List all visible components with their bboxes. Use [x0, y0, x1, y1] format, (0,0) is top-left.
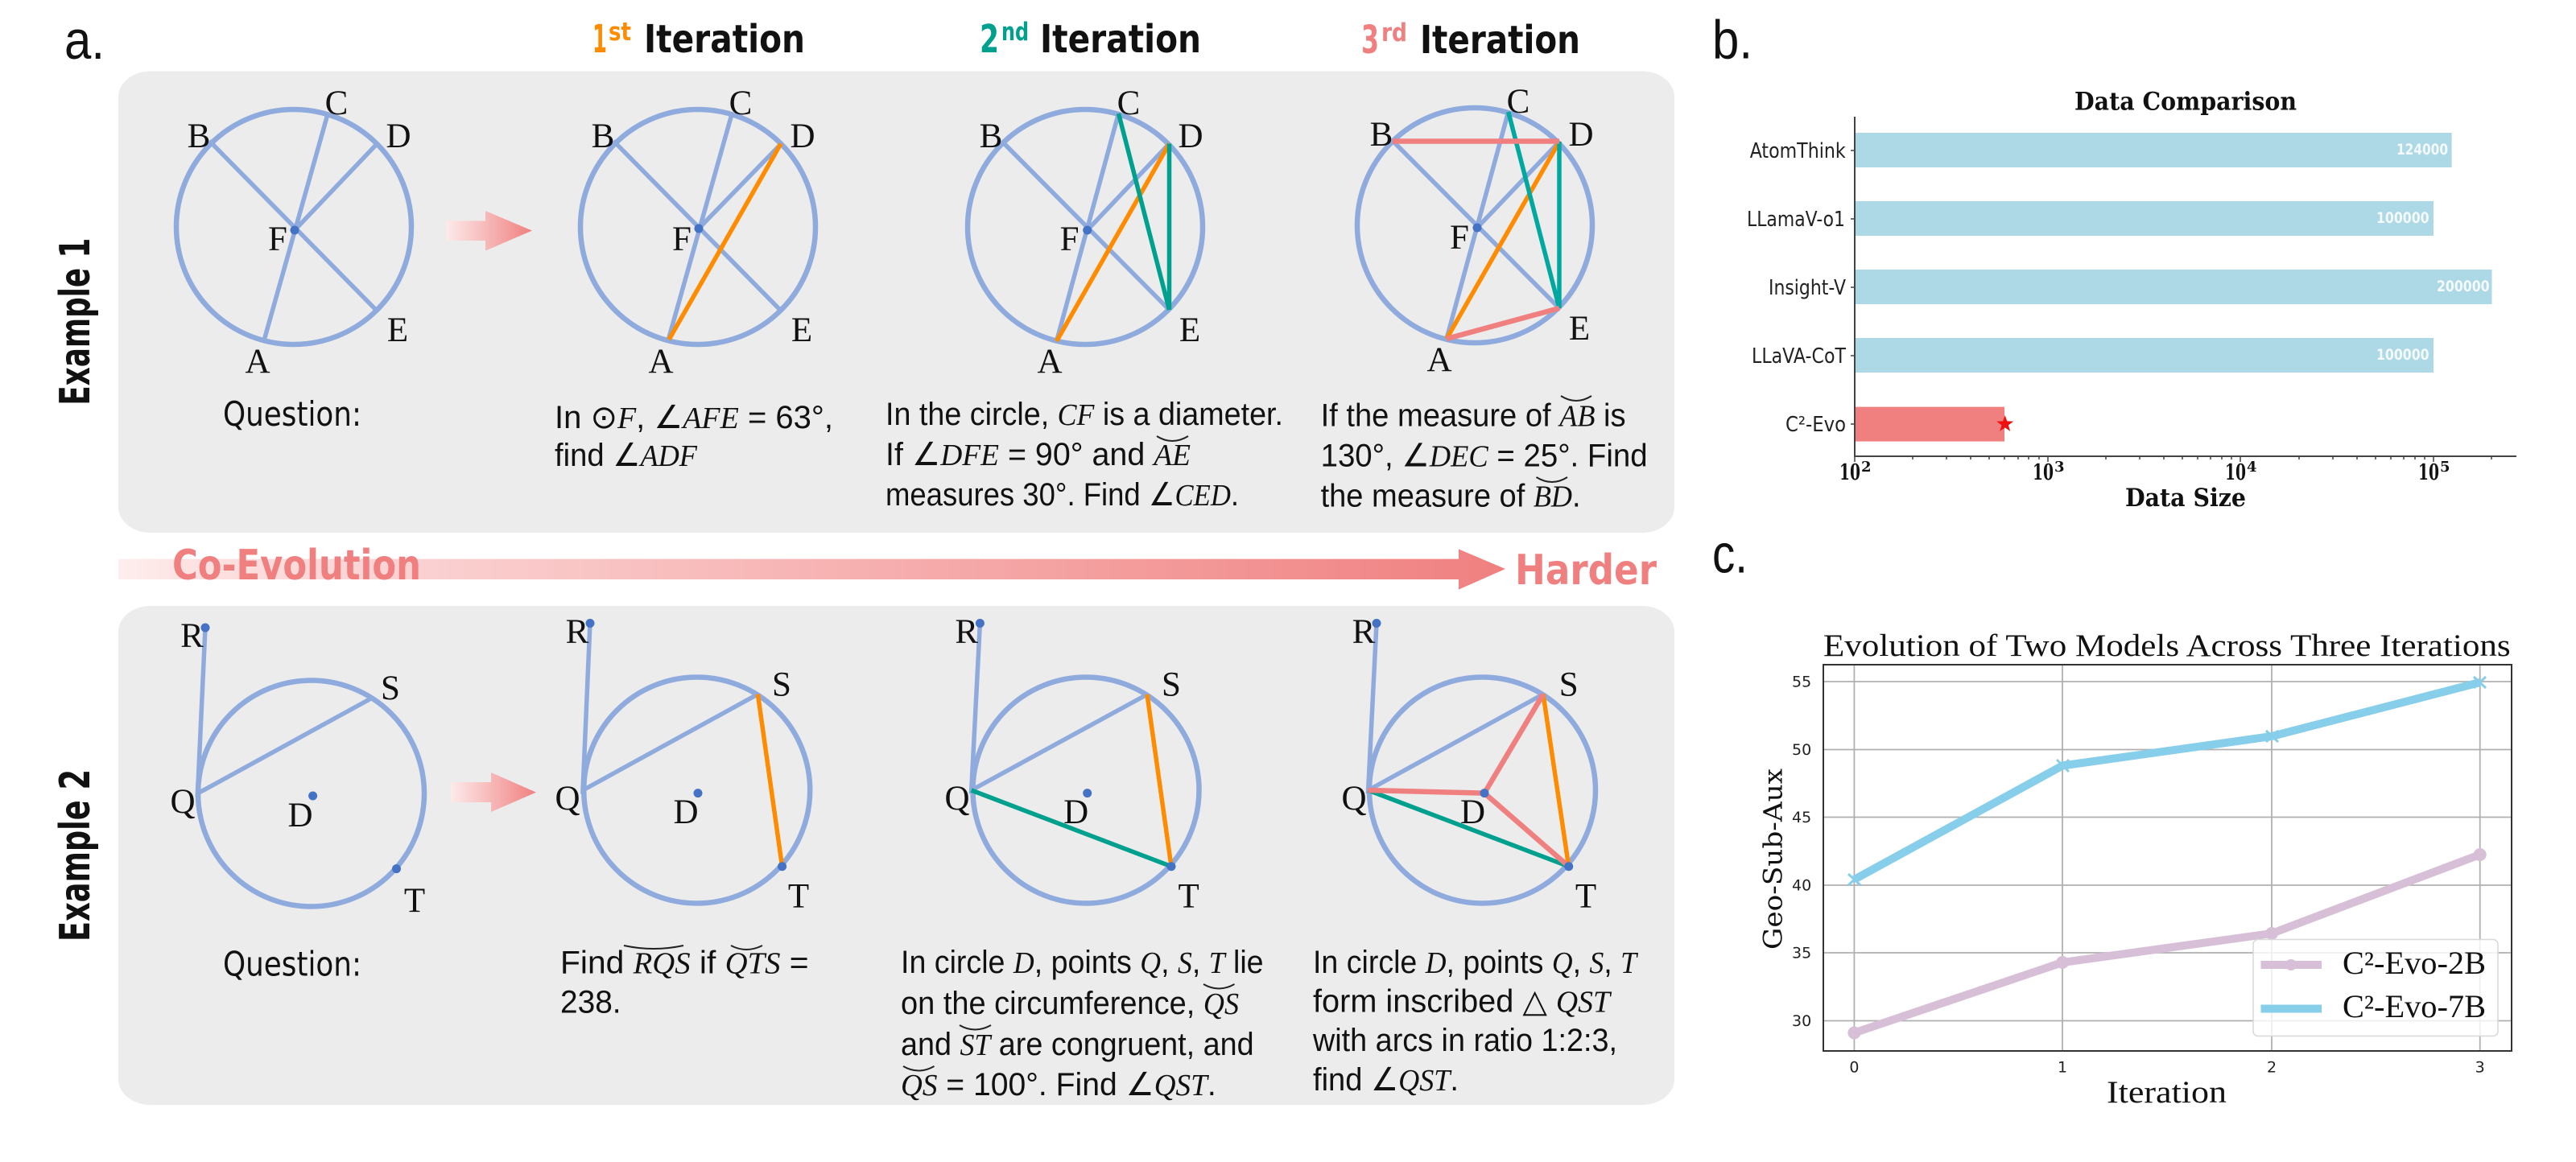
x tick labels: 10	[1839, 460, 1860, 485]
bar values: 100000	[2376, 346, 2429, 364]
diagram: example 1 iteration 3: A	[1426, 341, 1452, 379]
text: example 2 iteration 3 question: find ∠QST.	[1313, 1062, 1459, 1098]
x tick labels: 10	[2418, 460, 2439, 485]
diagram: example 2 iteration 2: S	[1162, 666, 1181, 703]
diagram: example 1 question: B	[188, 117, 210, 155]
text: co-evolution: Co-Evolution	[172, 542, 421, 590]
row label: Example 2: Example 2	[52, 769, 100, 942]
text: example 2 iteration 2 question: and ST are congruent, and	[901, 1027, 1254, 1062]
panel label c: c.	[1712, 523, 1748, 584]
text: example 1 iteration 1 question: find ∠ADF	[555, 438, 698, 473]
text: example 2 iteration 3 question: with arcs in ratio 1:2:3,	[1312, 1023, 1617, 1058]
diagram: example 2 question	[170, 617, 425, 920]
diagram: example 1 iteration 3	[1357, 83, 1594, 379]
icon: red star	[1996, 415, 2013, 431]
diagram: example 2 iteration 3: S	[1559, 666, 1579, 703]
heading: 2nd iteration	[980, 17, 1201, 62]
line: C2-Evo-2B	[1847, 848, 2487, 1040]
diagram: example 2 question: S	[381, 670, 400, 707]
y tick labels: 30	[1792, 1012, 1811, 1030]
x tick labels: 5	[2440, 459, 2450, 476]
diagram: example 2 question: T	[404, 882, 425, 920]
x tick labels: 4	[2247, 459, 2257, 476]
text: example 2 iteration 2 question: on the circumference, QS	[901, 986, 1239, 1021]
text: example 2 iteration 3 question: In circle D, points Q, S, T	[1313, 945, 1639, 980]
heading: 3rd iteration: rd	[1381, 19, 1407, 47]
chart title: Data Comparison	[2074, 88, 2297, 117]
y tick labels: 40	[1792, 877, 1811, 895]
diagram: example 2 iteration 1: S	[772, 666, 791, 703]
axes	[1855, 117, 2516, 456]
arrow: co-evolution gradient	[118, 549, 1505, 590]
diagram: example 1 iteration 2: C	[1117, 84, 1140, 122]
legend: C²-Evo-2B	[2343, 945, 2486, 981]
y category labels	[1747, 139, 1846, 437]
y category labels: LLamaV-o1	[1747, 208, 1845, 232]
diagram: example 2 iteration 3	[1341, 613, 1596, 916]
y axis label: Geo-Sub-Aux	[1758, 768, 1789, 950]
x tick labels: 1	[2058, 1059, 2067, 1077]
diagram: example 2 iteration 3: D	[1460, 793, 1485, 831]
diagram: example 1 iteration 3: D	[1568, 116, 1594, 154]
diagram: example 1 iteration 2: A	[1037, 343, 1063, 381]
legend	[2253, 940, 2498, 1036]
text: harder: Harder	[1515, 546, 1657, 595]
panel: example 1	[118, 71, 1674, 533]
text: example 2 question label: Question:	[223, 945, 361, 984]
panel: example 2	[118, 606, 1674, 1105]
heading: 2nd iteration: 2	[980, 17, 999, 62]
diagram: example 2 iteration 1: D	[673, 793, 699, 831]
diagram: example 2 iteration 3: T	[1575, 878, 1596, 916]
diagram: example 2 iteration 1	[555, 613, 810, 916]
y tick labels: 45	[1792, 809, 1811, 826]
text: example 2 iteration 1 question: Find RQS if QTS =	[560, 946, 809, 981]
diagram: example 2 iteration 1: R	[566, 613, 589, 651]
diagram: example 1 iteration 2	[968, 84, 1203, 381]
diagram: example 1 iteration 1	[580, 84, 815, 381]
line: C2-Evo-7B	[1848, 677, 2486, 885]
y category labels: AtomThink	[1750, 139, 1846, 163]
diagram: example 1 iteration 1: D	[790, 117, 815, 155]
x tick labels: 10	[2033, 460, 2054, 485]
diagram: example 2 iteration 3: Q	[1341, 780, 1367, 818]
diagram: example 1 iteration 3: B	[1370, 116, 1393, 154]
heading: 3rd iteration: Iteration	[1420, 18, 1580, 63]
legend: C²-Evo-7B	[2343, 988, 2486, 1024]
text: example 1 iteration 3 question	[1321, 396, 1648, 513]
heading: 1st iteration: st	[609, 18, 631, 47]
diagram: example 2 iteration 2: R	[955, 613, 978, 651]
x tick labels: 0	[1849, 1059, 1859, 1077]
y tick labels: 35	[1792, 945, 1811, 962]
diagram: example 1 iteration 2: F	[1060, 220, 1080, 258]
text: example 1 iteration 3 question: 130°, ∠DEC = 25°. Find	[1321, 438, 1648, 473]
heading: 1st iteration: Iteration	[644, 17, 805, 62]
diagram: example 1 question: D	[386, 117, 411, 155]
text: example 1 question label: Question:	[223, 394, 361, 434]
text: example 2 iteration 2 question: In circle D, points Q, S, T lie	[901, 945, 1264, 980]
diagram: example 1 iteration 2: E	[1179, 311, 1200, 349]
diagram: example 1 iteration 1: A	[648, 343, 674, 381]
arrow: example 2	[451, 773, 536, 812]
bar values	[2376, 141, 2490, 364]
diagram: example 1 iteration 3: F	[1450, 219, 1469, 257]
diagram: example 1 question: F	[268, 220, 287, 258]
y tick labels	[1792, 673, 1811, 1030]
x tick labels: 2	[1861, 459, 1872, 476]
text: example 1 iteration 3 question: the measure of BD.	[1321, 478, 1581, 513]
chart title: Evolution of Two Models Across Three Iterations	[1823, 628, 2511, 663]
text: example 1 iteration 2 question: If ∠DFE = 90° and AE	[886, 437, 1191, 472]
text: example 1 iteration 3 question: If the measure of AB is	[1321, 398, 1626, 433]
arrow: example 1	[446, 211, 532, 251]
diagram: example 2 iteration 1: Q	[555, 780, 580, 818]
diagram: example 1 question: A	[245, 343, 270, 381]
y tick labels: 55	[1792, 673, 1811, 690]
diagram: example 2 iteration 2: T	[1178, 878, 1199, 916]
bar values: 100000	[2376, 209, 2429, 227]
diagram: example 2 question: Q	[170, 783, 196, 821]
row label: Example 1: Example 1	[52, 238, 100, 406]
diagram: example 2 iteration 3: R	[1352, 613, 1376, 651]
diagram: example 1 iteration 1: F	[672, 220, 691, 258]
text: example 1 iteration 1 question	[555, 400, 833, 473]
diagram: example 2 iteration 2: D	[1063, 793, 1088, 831]
diagram: example 2 question: R	[180, 617, 204, 655]
diagram: example 1 iteration 1: B	[592, 117, 614, 155]
diagram: example 2 iteration 1: T	[788, 878, 809, 916]
x axis label: Data Size	[2125, 484, 2246, 513]
text: example 2 iteration 3 question	[1312, 945, 1639, 1098]
bars	[1855, 133, 2492, 442]
bar values: 200000	[2437, 278, 2490, 295]
heading: 3rd iteration: 3	[1361, 18, 1379, 63]
x tick labels	[1849, 1059, 2485, 1077]
y tick labels: 50	[1792, 741, 1811, 759]
x tick labels	[1839, 459, 2450, 485]
heading: 2nd iteration: nd	[1001, 18, 1029, 47]
y category labels: C²-Evo	[1785, 413, 1846, 437]
diagram: example 1 question	[176, 84, 411, 381]
y category labels: Insight-V	[1769, 276, 1846, 300]
text: example 2 iteration 3 question: form inscribed △ QST	[1313, 983, 1612, 1019]
panel label b: b.	[1712, 10, 1752, 71]
text: example 1 iteration 2 question: measures 30°. Find ∠CED.	[886, 477, 1239, 513]
diagram: example 2 question: D	[287, 797, 313, 834]
diagram: example 1 iteration 1: E	[791, 311, 812, 349]
bar values: 124000	[2396, 141, 2448, 159]
diagram: example 1 question: C	[325, 84, 348, 122]
diagram: example 1 iteration 2: B	[980, 117, 1002, 155]
diagram: example 1 iteration 3: E	[1569, 310, 1590, 348]
text: example 1 iteration 2 question	[886, 397, 1283, 513]
text: example 2 iteration 1 question	[560, 946, 809, 1020]
diagram: example 1 iteration 2: D	[1178, 117, 1203, 155]
diagram: example 2 iteration 2: Q	[944, 780, 970, 818]
text: example 2 iteration 2 question	[901, 945, 1264, 1102]
y category labels: LLaVA-CoT	[1752, 344, 1846, 369]
bar chart: data comparison	[1747, 88, 2516, 513]
x tick labels: 3	[2475, 1059, 2485, 1077]
text: example 2 iteration 1 question: 238.	[560, 985, 621, 1020]
diagram: example 2 iteration 2	[944, 613, 1199, 916]
diagram: example 1 iteration 1: C	[729, 84, 752, 122]
heading: 3rd iteration	[1361, 18, 1580, 63]
x tick labels: 3	[2054, 459, 2065, 476]
x axis label: Iteration	[2107, 1075, 2227, 1110]
grid lines	[1823, 665, 2512, 1051]
text: example 1 iteration 2 question: In the circle, CF is a diameter.	[886, 397, 1283, 432]
x tick labels: 2	[2267, 1059, 2277, 1077]
plot frame	[1823, 665, 2512, 1051]
line chart: evolution of two models	[1758, 628, 2512, 1110]
diagram: example 1 question: E	[387, 311, 408, 349]
heading: 2nd iteration: Iteration	[1040, 17, 1201, 62]
text: example 2 iteration 2 question: QS = 100°. Find ∠QST.	[901, 1067, 1216, 1102]
heading: 1st iteration: 1	[592, 17, 607, 62]
x tick labels: 10	[2225, 460, 2246, 485]
text: example 1 iteration 1 question: In ⊙F, ∠AFE = 63°,	[555, 400, 833, 435]
diagram: example 1 iteration 3: C	[1507, 83, 1530, 121]
axis ticks	[1851, 150, 2491, 462]
heading: 1st iteration	[592, 17, 805, 62]
panel label a: a.	[64, 10, 105, 71]
